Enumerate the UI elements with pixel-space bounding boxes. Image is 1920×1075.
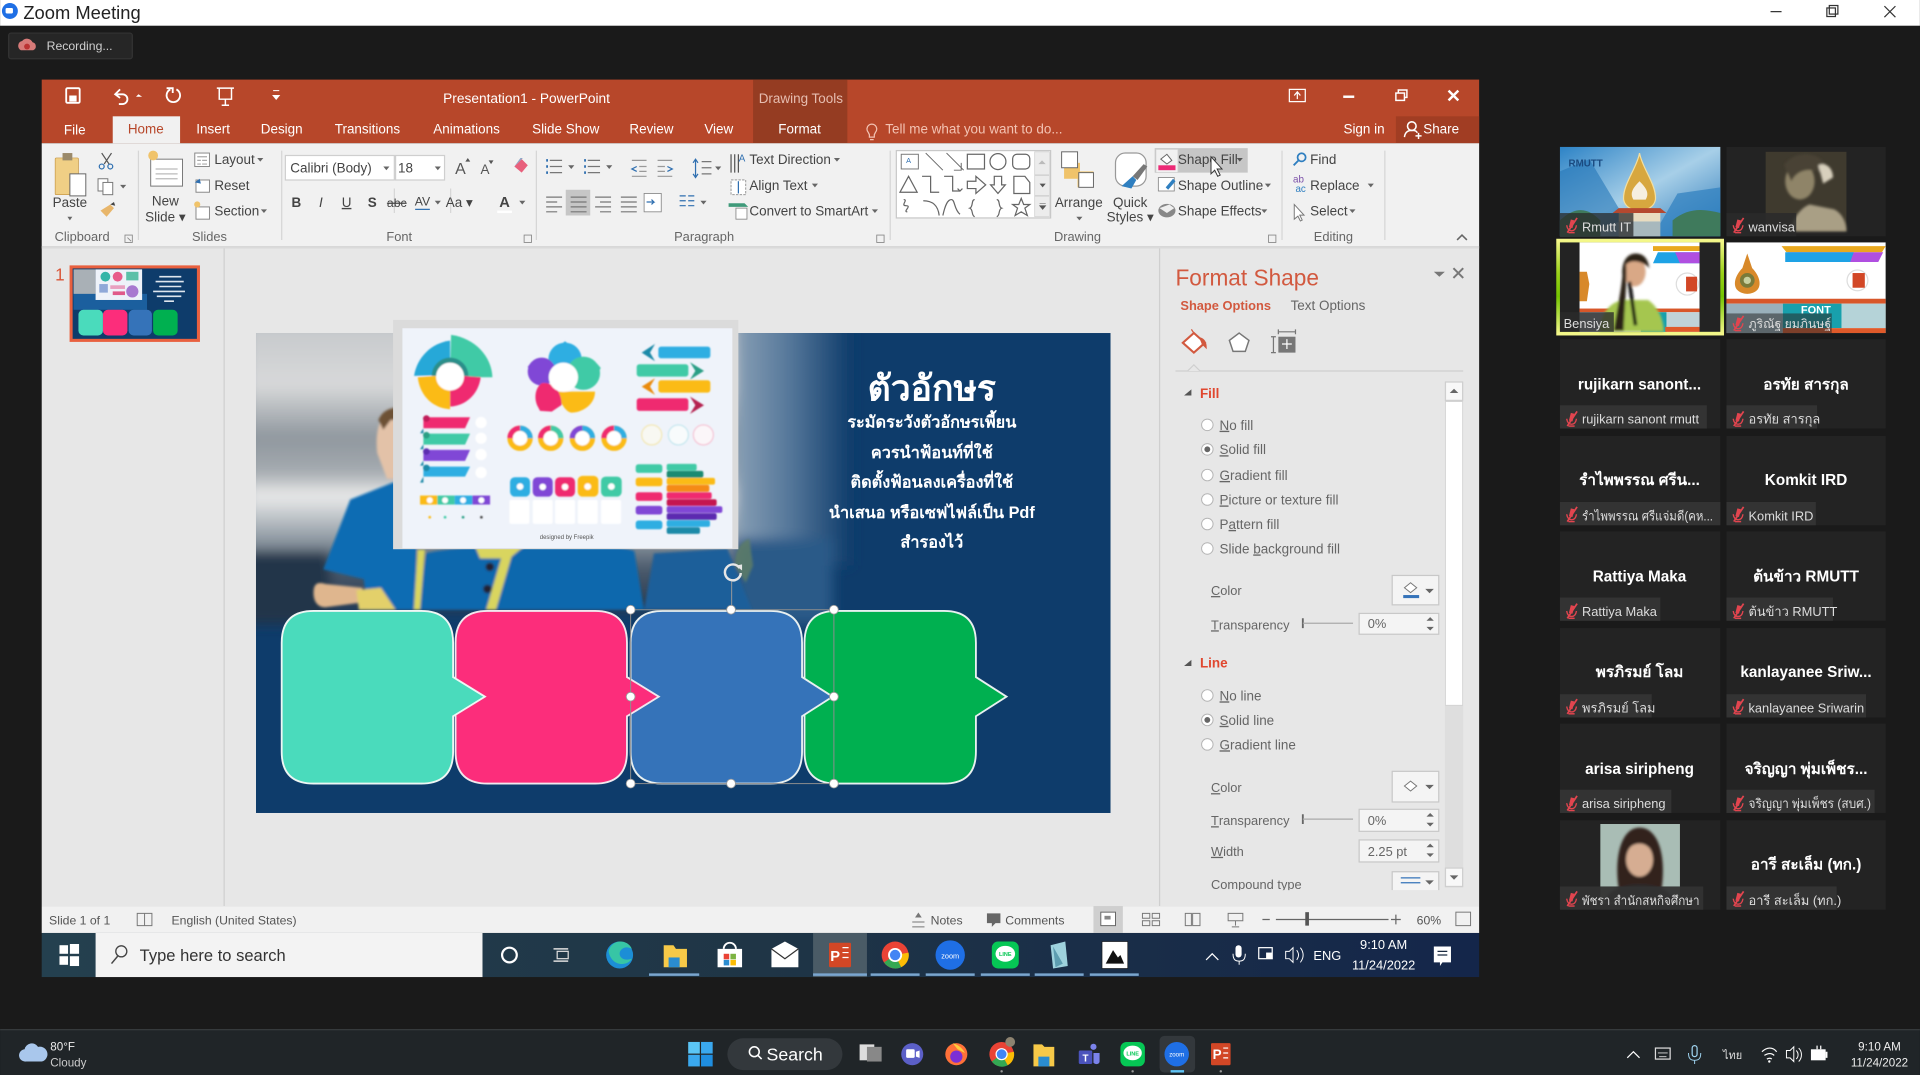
fill section: Transparency: [1211, 617, 1290, 632]
zoom title bar: Zoom Meeting: [23, 2, 141, 23]
drawing group: Shape Outline: [1178, 178, 1263, 193]
status bar: Slide 1 of 1: [49, 913, 110, 927]
tile: arisa siripheng: [1560, 724, 1720, 813]
editing group: Replace: [1310, 178, 1360, 193]
windows 11 taskbar: [0, 1030, 1920, 1075]
shared screen taskbar: [42, 933, 1479, 977]
slide background photo: [245, 321, 1111, 813]
fill section: Transparency: [1211, 813, 1290, 828]
ribbon tabs: Review: [629, 121, 674, 136]
editing group: [1293, 152, 1467, 244]
font group: AV: [415, 195, 431, 209]
drawing group: Quick: [1113, 195, 1148, 210]
tile: arisa siripheng: arisa siripheng: [1585, 761, 1694, 778]
fill section: No line: [1220, 688, 1261, 703]
ribbon tabs: Sign in: [1343, 121, 1385, 136]
tile: charinya: จริญญา พุ่มเพ็ชร...: [1745, 758, 1868, 779]
font group: Aa ▾: [446, 195, 473, 210]
font group: I: [319, 195, 323, 210]
four ring graphics: [510, 428, 624, 448]
ribbon: [42, 143, 1479, 246]
slide thumbnail: [55, 264, 198, 340]
fill section: Width: [1211, 844, 1244, 859]
selection handles: [626, 564, 838, 788]
tile: Komkit IRD: Komkit IRD: [1748, 508, 1813, 523]
ribbon tabs: Animations: [433, 121, 500, 136]
recording indicator: Recording...: [47, 39, 113, 53]
tile: Rattiya Maka: Rattiya Maka: [1582, 604, 1658, 619]
drawing group: Arrange: [1055, 195, 1103, 210]
fill section: No fill: [1220, 418, 1253, 433]
slide: [245, 320, 1111, 813]
fill section: Line: [1200, 655, 1228, 670]
ribbon tabs: View: [704, 121, 734, 136]
slide thumbnail: 1: [55, 264, 65, 284]
paragraph group: Align Text: [749, 178, 808, 193]
pinned apps: [860, 1036, 1231, 1073]
weather widget: [19, 1041, 87, 1069]
fill section: Color: [1211, 780, 1242, 795]
paragraph group: Text Direction: [749, 152, 831, 167]
tile: rujikarn: rujikarn sanont...: [1578, 376, 1701, 393]
status bar: Notes: [931, 913, 963, 927]
powerpoint title bar: Drawing Tools: [759, 91, 843, 106]
tile: kanlayanee: kanlayanee Sriwarin: [1748, 701, 1864, 716]
tile: pornpirom: [1560, 628, 1720, 717]
drawing group: [1054, 148, 1276, 244]
tile: aree: อารี สะเล็ม (ทก.): [1748, 892, 1841, 908]
tile: Rmutt IT: Rmutt IT: [1582, 219, 1631, 234]
system tray: 9:10 AM: [1858, 1041, 1901, 1054]
pinned apps: P: [1213, 1047, 1222, 1062]
tile: wanvisa: [1726, 147, 1886, 236]
fill section: Slide background fill: [1220, 541, 1340, 556]
tile: Rmutt IT: RMUTT: [1569, 159, 1603, 170]
pinned apps: zoom: [1169, 1052, 1184, 1059]
tile: Komkit IRD: Komkit IRD: [1765, 472, 1847, 489]
ribbon tabs: Design: [261, 121, 303, 136]
tile: active speaker Bensiya: [1558, 241, 1722, 334]
slide text block: ระมัดระวังตัวอักษรเพี้ยน: [847, 409, 1017, 431]
ribbon tabs: [64, 116, 1459, 143]
slides group: Slides: [192, 229, 227, 244]
taskbar apps: P: [830, 949, 840, 965]
editing group: ab: [1293, 174, 1304, 185]
clipboard group: [53, 153, 132, 244]
drawing group: Drawing: [1054, 229, 1101, 244]
tile: rampaiphan: [1560, 436, 1720, 525]
ribbon tabs: Tell me what you want to do...: [885, 121, 1063, 136]
callout: blue: [631, 611, 833, 784]
powerpoint title bar: [42, 80, 1479, 143]
cursor: [1211, 157, 1222, 176]
slide text block: ควรนำฟ้อนท์ที่ใช้: [871, 440, 993, 462]
taskbar apps: zoom: [941, 952, 959, 961]
tile: tonkhao RMUTT: ต้นข้าว RMUTT: [1748, 604, 1837, 619]
font group: 18: [398, 161, 413, 176]
paragraph group: A: [739, 154, 746, 165]
slides group: Section: [214, 203, 259, 218]
tile: orathai: [1726, 339, 1886, 429]
status bar: [42, 906, 1479, 933]
slides group: New: [152, 194, 179, 209]
timeline graphic: [420, 496, 490, 519]
tile: tonkhao RMUTT: [1726, 531, 1886, 621]
fill section: Solid fill: [1220, 442, 1266, 457]
ribbon tabs: Share: [1423, 121, 1459, 136]
stacked bars graphic: [636, 464, 722, 534]
callout: teal: [282, 611, 485, 784]
fill section: 0%: [1368, 813, 1386, 828]
shapes gallery: A: [906, 156, 911, 165]
pane scrollbar: [1445, 382, 1463, 888]
line section: [1184, 660, 1191, 666]
fill section: Pattern fill: [1220, 517, 1279, 532]
system tray: ไทย: [1722, 1049, 1742, 1062]
tile: aree: อารี สะเล็ม (ทก.): [1751, 853, 1861, 873]
image credit: designed by Freepik: [540, 535, 594, 541]
editing group: Select: [1310, 203, 1348, 218]
tile: pornpirom: พรภิรมย์ โลม: [1582, 701, 1656, 716]
tile: kanlayanee: [1726, 628, 1886, 717]
status bar: 60%: [1417, 913, 1441, 927]
tile: rujikarn: rujikarn sanont rmutt: [1582, 412, 1699, 427]
tile: rampaiphan: รำไพพรรณ ศรีแจ่มดี(คห...: [1582, 508, 1713, 523]
tile: shared slide participant: FONT: [1801, 304, 1831, 316]
clipboard group: Clipboard: [55, 229, 110, 244]
start button and search: [688, 1038, 842, 1070]
pane tab icons: [1183, 329, 1295, 353]
powerpoint window: [42, 80, 1479, 977]
fill section: Color: [1211, 583, 1242, 598]
status bar: English (United States): [172, 913, 297, 927]
taskbar apps: LINE: [999, 952, 1012, 958]
ribbon tabs: File: [64, 123, 86, 138]
icon tiles graphic: [509, 476, 622, 524]
slide text block: [829, 409, 1035, 551]
pinned apps: LINE: [1126, 1051, 1139, 1057]
paragraph group: [546, 152, 884, 244]
fill section: 0%: [1368, 616, 1386, 631]
tile: Komkit IRD: [1726, 436, 1886, 525]
drawing group: Shape Fill: [1178, 152, 1238, 167]
tile: tonkhao RMUTT: ต้นข้าว RMUTT: [1753, 568, 1860, 586]
editor workspace: [42, 246, 1479, 906]
taskbar tray: [1206, 937, 1451, 973]
ribbon list graphic: [420, 415, 487, 483]
zoom participants panel: [1558, 147, 1886, 910]
search box: [96, 933, 482, 977]
tile: patchara with photo: พัชรา สำนักสหกิจศึกษา: [1582, 893, 1700, 908]
editing group: Editing: [1314, 229, 1353, 244]
tile: arisa siripheng: arisa siripheng: [1582, 796, 1666, 811]
font group: U: [342, 195, 351, 210]
shapes gallery: [896, 151, 1051, 218]
tile: pornpirom: พรภิรมย์ โลม: [1596, 662, 1683, 681]
format shape pane: Format Shape: [1175, 264, 1319, 290]
editing group: Find: [1310, 152, 1336, 167]
ribbon tabs: Transitions: [335, 121, 400, 136]
fill section: Compound type: [1211, 877, 1302, 892]
slide heading: ตัวอักษร: [868, 368, 996, 408]
ribbon tabs: Slide Show: [532, 121, 600, 136]
font group: A: [455, 161, 466, 178]
fill section: [1184, 386, 1439, 901]
drawing group: Styles ▾: [1107, 210, 1154, 225]
format shape pane: Shape Options: [1180, 298, 1271, 313]
tile: charinya: [1726, 724, 1886, 813]
clipboard group: Paste: [53, 195, 87, 210]
fill section: Gradient fill: [1220, 468, 1288, 483]
tile: active speaker Bensiya: Bensiya: [1564, 316, 1610, 331]
callout shapes: [282, 611, 1007, 784]
tile: patchara with photo: [1560, 820, 1720, 910]
fill section: 2.25 pt: [1368, 844, 1407, 859]
infographic reference image: [393, 320, 738, 549]
taskbar apps: [502, 933, 1139, 977]
arrow banners graphic: [637, 344, 710, 414]
slide text block: ติดตั้งฟ้อนลงเครื่องที่ใช้: [851, 469, 1013, 491]
taskbar tray: 9:10 AM: [1360, 937, 1407, 952]
search box: Type here to search: [140, 946, 286, 965]
font group: S: [368, 195, 377, 210]
font group: A: [499, 195, 510, 211]
start button and search: Search: [767, 1044, 823, 1064]
system tray: 11/24/2022: [1851, 1056, 1908, 1069]
fill section: Solid line: [1220, 713, 1274, 728]
powerpoint title bar: Presentation1 - PowerPoint: [443, 91, 610, 106]
weather widget: Cloudy: [50, 1056, 87, 1069]
slides group: Slide ▾: [145, 210, 186, 225]
tile: orathai: อรทัย สารกุล: [1763, 376, 1849, 394]
callout: pink: [456, 611, 659, 784]
slide text block: สำรองไว้: [900, 531, 963, 551]
status bar: Comments: [1005, 913, 1064, 927]
font group: B: [292, 195, 302, 210]
editing group: ac: [1295, 184, 1306, 195]
ribbon tabs: Insert: [196, 121, 230, 136]
weather widget: 80°F: [50, 1041, 75, 1054]
font group: Calibri (Body): [290, 161, 372, 176]
flower chart graphic: [528, 341, 601, 413]
paragraph group: Convert to SmartArt: [749, 203, 869, 218]
font group: A: [480, 162, 489, 177]
tile: orathai: อรทัย สารกุล: [1748, 412, 1820, 428]
tile: Rattiya Maka: [1560, 531, 1720, 621]
font group: Font: [386, 229, 413, 244]
tile: shared slide participant: ภูริณัฐ ยมภินษฐ์: [1748, 317, 1831, 332]
tile: wanvisa: wanvisa: [1747, 219, 1796, 234]
callout: green: [805, 611, 1007, 784]
tile: rampaiphan: รำไพพรรณ ศรีน...: [1579, 470, 1700, 489]
slides group: [145, 151, 267, 244]
font group: abc: [387, 196, 407, 210]
donut chart graphic: [414, 335, 492, 409]
tile: shared slide participant: [1726, 242, 1886, 333]
format shape pane: [1175, 264, 1463, 901]
fill section: Fill: [1200, 386, 1219, 401]
ribbon tabs: Format: [778, 121, 821, 136]
paragraph group: Paragraph: [674, 229, 734, 244]
ribbon tabs: Home: [128, 121, 164, 136]
fill section: Gradient line: [1220, 737, 1296, 752]
tile: rujikarn: [1560, 339, 1720, 429]
slides group: Reset: [214, 178, 250, 193]
pinned apps: T: [1083, 1054, 1089, 1065]
fill section: Picture or texture fill: [1220, 492, 1338, 507]
taskbar tray: 11/24/2022: [1352, 958, 1415, 973]
font group: [285, 155, 531, 244]
recording indicator: [9, 33, 132, 59]
tile: aree: [1726, 820, 1886, 910]
tile: charinya: จริญญา พุ่มเพ็ชร (สบศ.): [1748, 795, 1871, 812]
format shape pane: Text Options: [1291, 298, 1366, 313]
taskbar tray: ENG: [1313, 948, 1341, 963]
slide text block: นำเสนอ หรือเซฟไฟล์เป็น Pdf: [829, 501, 1035, 522]
system tray: [1627, 1041, 1908, 1069]
tile: kanlayanee: kanlayanee Sriw...: [1740, 664, 1872, 681]
zoom title bar: [0, 0, 1920, 26]
tile: Rmutt IT: [1560, 147, 1720, 236]
tile: Rattiya Maka: Rattiya Maka: [1593, 569, 1687, 586]
slides group: Layout: [214, 152, 255, 167]
drawing group: Shape Effects: [1178, 203, 1262, 218]
